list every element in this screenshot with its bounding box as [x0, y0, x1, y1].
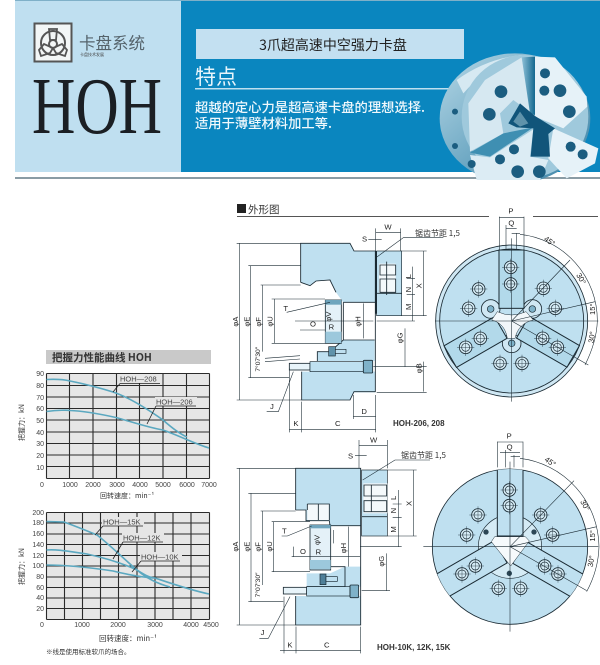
drawing section heading	[237, 202, 598, 217]
product title box: 3爪超高速中空强力卡盘	[259, 35, 407, 55]
angle labels: P	[507, 432, 512, 441]
dimension labels: φG	[396, 332, 405, 343]
x axis ticks: 3000	[109, 482, 125, 489]
features text: 适用于薄壁材料加工等.	[195, 113, 332, 132]
curve HOH-208	[46, 379, 187, 437]
x axis ticks	[40, 482, 217, 489]
dimension labels: M	[404, 304, 413, 310]
dimension labels: φV	[324, 311, 333, 322]
label HOH-15K	[95, 517, 144, 535]
x axis ticks: 7000	[201, 482, 217, 489]
y axis ticks: 180	[32, 520, 44, 527]
dimension labels: L	[404, 274, 413, 278]
model name HOH: HOH	[32, 63, 162, 151]
through bolt	[283, 585, 359, 598]
chart 1: gripping force curve	[36, 371, 217, 489]
angle labels: Q	[508, 219, 514, 228]
logo text: 卡盘技术发展	[80, 51, 104, 58]
jaw slot	[522, 57, 535, 115]
dimension labels: S	[362, 235, 367, 244]
y axis ticks: 100	[32, 563, 44, 570]
features text: 超越的定心力是超高速卡盘的理想选择.	[195, 97, 425, 116]
centre bore	[491, 537, 529, 566]
label HOH-12K: HOH—12K	[123, 534, 161, 542]
label HOH-12K	[113, 533, 164, 559]
right jaw	[548, 128, 598, 178]
dimension labels: X	[404, 501, 413, 506]
dimension labels: φF	[254, 317, 263, 327]
y axis ticks: 160	[32, 531, 44, 538]
through bolt	[289, 360, 373, 373]
chuck body	[296, 468, 361, 625]
angle labels	[508, 207, 597, 344]
dimension labels: O	[300, 547, 306, 556]
x axis ticks	[40, 622, 219, 629]
chuck body	[301, 243, 375, 400]
dimension lines	[423, 442, 599, 632]
bolt holes	[457, 259, 566, 372]
dimension labels: L	[389, 496, 398, 500]
y axis ticks: 20	[36, 453, 44, 460]
x axis ticks: 3000	[147, 622, 163, 629]
jaw screws	[487, 306, 536, 347]
leader J	[259, 597, 290, 638]
centre recess	[478, 515, 542, 578]
logo text: 卡盘系统	[79, 30, 145, 54]
jaw lobes	[481, 300, 542, 353]
angle labels: 30°	[586, 555, 597, 568]
angle labels: 45°	[543, 455, 557, 469]
y axis ticks: 30	[36, 441, 44, 448]
front view: HOH-10K, 12K, 15K	[423, 432, 599, 632]
dimension labels: O	[310, 320, 316, 329]
drawing section heading: 外形图	[248, 202, 280, 217]
centre sleeve	[325, 300, 346, 356]
label HOH-208	[113, 374, 161, 392]
chart 2 x axis title: 回转速度：min⁻¹	[99, 633, 157, 644]
y axis ticks: 200	[32, 510, 44, 517]
bottom left jaw	[470, 129, 548, 180]
y axis ticks: 40	[36, 595, 44, 602]
model label 2: HOH-10K, 12K, 15K	[377, 643, 451, 652]
x axis ticks: 5000	[155, 482, 171, 489]
angle labels: Q	[507, 442, 513, 451]
serration pitch label 2: 锯齿节距 1,5	[401, 450, 446, 461]
x axis ticks: 4000	[132, 482, 148, 489]
x axis ticks: 0	[40, 622, 44, 629]
dimension labels: φH	[339, 543, 348, 553]
logo icon	[34, 24, 72, 62]
x axis ticks: 1000	[62, 482, 78, 489]
model label 1: HOH-206, 208	[393, 419, 445, 428]
dimension labels: M	[389, 526, 398, 533]
dimension labels: J	[270, 402, 274, 411]
y axis ticks: 80	[36, 574, 44, 581]
body discs	[436, 245, 588, 397]
centre bore	[492, 312, 533, 338]
x axis ticks: 4000	[183, 622, 199, 629]
curve HOH-12K	[46, 550, 209, 594]
top jaw	[375, 251, 402, 316]
leader line for serration pitch	[376, 238, 443, 258]
dimension labels: φB	[415, 363, 424, 373]
dimension labels	[231, 436, 413, 649]
bolt holes	[453, 481, 567, 597]
centre bore	[508, 103, 555, 157]
label HOH-208: HOH—208	[120, 374, 157, 384]
y axis ticks: 50	[36, 418, 44, 425]
y axis ticks	[36, 371, 44, 472]
x axis ticks: 1000	[74, 622, 90, 629]
left jaw	[468, 57, 532, 152]
y axis ticks: 90	[36, 371, 44, 378]
side view: HOH-206, 208	[231, 222, 443, 432]
jaws	[435, 467, 585, 598]
leader line for serration pitch	[363, 460, 430, 480]
dimension labels: T	[282, 526, 287, 535]
dimension labels: φE	[242, 317, 251, 327]
dimension labels: K	[293, 419, 299, 428]
y axis ticks: 140	[32, 542, 44, 549]
dimension labels: 7°07′30″	[254, 346, 262, 372]
x axis ticks: 0	[40, 482, 44, 489]
angle labels: 15°	[588, 530, 597, 542]
y axis ticks	[32, 510, 44, 613]
dimension lines	[435, 217, 598, 402]
curve HOH-10K	[46, 565, 153, 578]
dimension labels: φH	[354, 316, 363, 327]
dimension lines	[237, 440, 417, 653]
front view: HOH-206, 208	[435, 207, 598, 402]
angle labels	[507, 432, 597, 568]
dimension labels	[231, 222, 424, 428]
x axis ticks: 6000	[179, 482, 195, 489]
product photo: chuck	[440, 53, 598, 183]
curve HOH-206	[46, 410, 209, 448]
dimension lines	[237, 228, 427, 432]
dimension labels: K	[287, 640, 293, 649]
angle labels: 30°	[586, 331, 597, 344]
dimension labels: J	[261, 628, 265, 637]
y axis ticks: 60	[36, 585, 44, 592]
chart 1 title	[46, 350, 211, 365]
y axis ticks: 40	[36, 430, 44, 437]
dimension labels: C	[335, 419, 341, 428]
y axis ticks: 10	[36, 465, 44, 472]
centre sleeve	[310, 525, 337, 585]
jaws	[444, 250, 579, 367]
dimension labels: φU	[266, 316, 275, 327]
y axis ticks: 60	[36, 406, 44, 413]
curve HOH-15K	[46, 522, 170, 587]
label HOH-10K: HOH—10K	[141, 552, 179, 562]
angle labels: 30°	[578, 498, 592, 513]
body disc	[432, 469, 588, 624]
y axis ticks: 20	[36, 606, 44, 613]
side view: HOH-10K, 12K, 15K	[231, 436, 430, 653]
y axis ticks: 120	[32, 553, 44, 560]
top jaw	[535, 57, 587, 128]
label HOH-206: HOH—206	[156, 398, 193, 406]
x axis ticks: 2000	[85, 482, 101, 489]
dimension labels: S	[348, 451, 353, 460]
x axis ticks: 2000	[110, 622, 126, 629]
dimension labels: φG	[377, 556, 386, 567]
dimension labels: W	[384, 222, 392, 231]
y axis ticks: 80	[36, 383, 44, 390]
dimension labels: D	[361, 407, 367, 416]
dimension labels: X	[414, 283, 423, 288]
dimension labels: φA	[231, 316, 240, 327]
holes	[452, 68, 588, 178]
product title box	[196, 29, 464, 59]
chart 2 y axis title: 把握力：kN	[17, 548, 27, 585]
chart footnote: ※线是使用标准软爪的场合。	[46, 646, 130, 656]
dimension labels: C	[324, 640, 330, 649]
dimension labels: φA	[231, 541, 240, 552]
label HOH-206	[147, 397, 197, 424]
dimension labels: R	[329, 323, 335, 332]
leader J	[267, 372, 293, 412]
angle labels: 15°	[588, 303, 597, 315]
features text	[195, 97, 425, 132]
y axis ticks: 70	[36, 395, 44, 402]
features heading: 特点	[195, 61, 237, 91]
angle labels: 45°	[542, 234, 557, 248]
top jaw	[362, 470, 387, 536]
jaw slot lower	[470, 127, 533, 157]
dimension labels: N	[389, 508, 398, 513]
dimension labels: W	[370, 436, 378, 445]
angle labels: 30°	[574, 271, 588, 286]
serration pitch label 1: 锯齿节距 1,5	[415, 228, 460, 239]
dimension labels: N	[404, 287, 413, 292]
chart 2: gripping force curve	[32, 510, 219, 629]
dimension labels: φE	[242, 542, 251, 552]
label HOH-15K: HOH—15K	[103, 518, 141, 526]
x axis ticks: 4500	[203, 622, 219, 629]
dimension labels: φU	[265, 541, 274, 552]
header band	[15, 0, 600, 179]
jaw screws	[483, 529, 537, 576]
leader T	[282, 526, 312, 536]
dimension labels: φF	[254, 542, 263, 552]
dimension labels: R	[316, 548, 322, 557]
leader T	[287, 302, 330, 312]
chart 1 x axis title: 回转速度：min⁻¹	[100, 491, 154, 501]
dimension labels: φV	[312, 534, 321, 545]
angle labels: P	[508, 207, 513, 216]
dimension labels: T	[283, 304, 288, 313]
chart 1 y axis title: 把握力：kN	[17, 404, 27, 441]
label HOH-10K	[132, 552, 182, 572]
chart 1 title: 把握力性能曲线 HOH	[52, 350, 152, 365]
dimension labels: 7°07′30″	[254, 572, 262, 597]
